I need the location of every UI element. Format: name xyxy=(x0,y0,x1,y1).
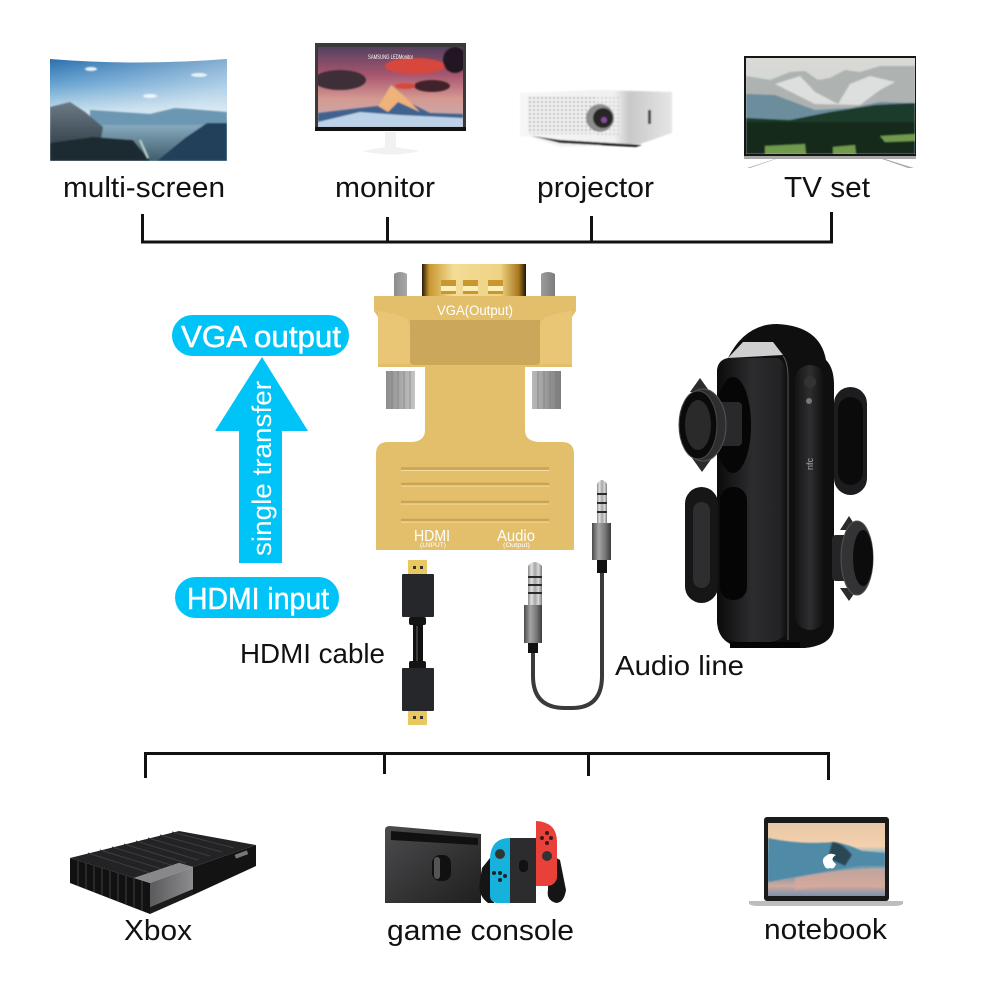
device: TV set xyxy=(744,56,916,168)
right plug xyxy=(592,480,611,573)
arrow: single transfer xyxy=(215,357,308,563)
body recesses xyxy=(715,377,751,473)
side thumb screws xyxy=(386,371,561,409)
right front panel xyxy=(193,845,256,895)
label: HDMI cable: HDMI cable xyxy=(240,638,385,669)
notebook logo xyxy=(823,854,836,869)
badge: VGA output: VGA output xyxy=(181,319,341,354)
device: speaker with exposed drivers xyxy=(679,324,873,648)
left plug xyxy=(524,562,542,653)
bracket: bottom connector xyxy=(146,754,828,780)
label: Audio line: Audio line xyxy=(615,650,744,681)
label: projector: projector xyxy=(537,172,654,204)
left driver xyxy=(679,378,742,472)
blue joy-con xyxy=(490,838,510,903)
label: game console: game console xyxy=(387,915,574,947)
top thumb screws xyxy=(394,272,555,297)
label: Xbox: Xbox xyxy=(124,915,193,947)
arrow: single transfer: single transfer xyxy=(247,381,277,556)
label: monitor: monitor xyxy=(335,172,435,204)
red joy-con xyxy=(536,821,557,886)
ribbed side xyxy=(70,858,150,914)
cable: audio line xyxy=(524,480,611,708)
grips xyxy=(479,853,566,903)
adapter body xyxy=(374,296,576,550)
lower right driver xyxy=(832,516,873,601)
TV stand xyxy=(744,156,916,168)
device: game console xyxy=(385,821,566,903)
device: projector xyxy=(520,90,672,147)
speaker shell: nfc xyxy=(805,457,815,470)
label: TV set: TV set xyxy=(784,172,870,204)
plate recess xyxy=(410,320,540,365)
VGA gold shell xyxy=(422,264,526,297)
device: Xbox set-top box xyxy=(70,831,256,914)
badge: HDMI input: HDMI input xyxy=(187,581,329,616)
right passive radiator xyxy=(834,387,867,495)
port labels: HDMI xyxy=(414,528,450,545)
device: notebook xyxy=(749,817,903,906)
notebook base xyxy=(749,901,903,906)
device: multi-screen curved display xyxy=(50,59,227,161)
dock xyxy=(385,826,481,903)
VGA label: VGA(Output) xyxy=(437,303,513,318)
cable: HDMI xyxy=(402,560,434,725)
bracket: top connector xyxy=(142,212,832,242)
adapter: VGA to HDMI gold converter: (LNPUT) xyxy=(420,542,446,549)
box top xyxy=(70,831,256,878)
label: notebook: notebook xyxy=(764,914,888,946)
adapter: VGA to HDMI gold converter: Audio xyxy=(497,528,535,545)
monitor stand xyxy=(362,132,420,154)
projector lens xyxy=(586,104,614,132)
console tablet xyxy=(510,838,536,903)
monitor brand text: SAMSUNG LEDMonitor xyxy=(368,55,413,61)
infographic xyxy=(50,43,916,946)
label: multi-screen: multi-screen xyxy=(63,172,225,204)
silver front block xyxy=(134,863,193,883)
device: monitor xyxy=(314,43,467,154)
adapter: VGA to HDMI gold converter xyxy=(374,264,576,550)
adapter: VGA to HDMI gold converter: (Output) xyxy=(503,542,530,549)
lower left passive radiator xyxy=(685,487,718,603)
speaker shell xyxy=(717,324,834,648)
grip ridges xyxy=(401,468,549,520)
